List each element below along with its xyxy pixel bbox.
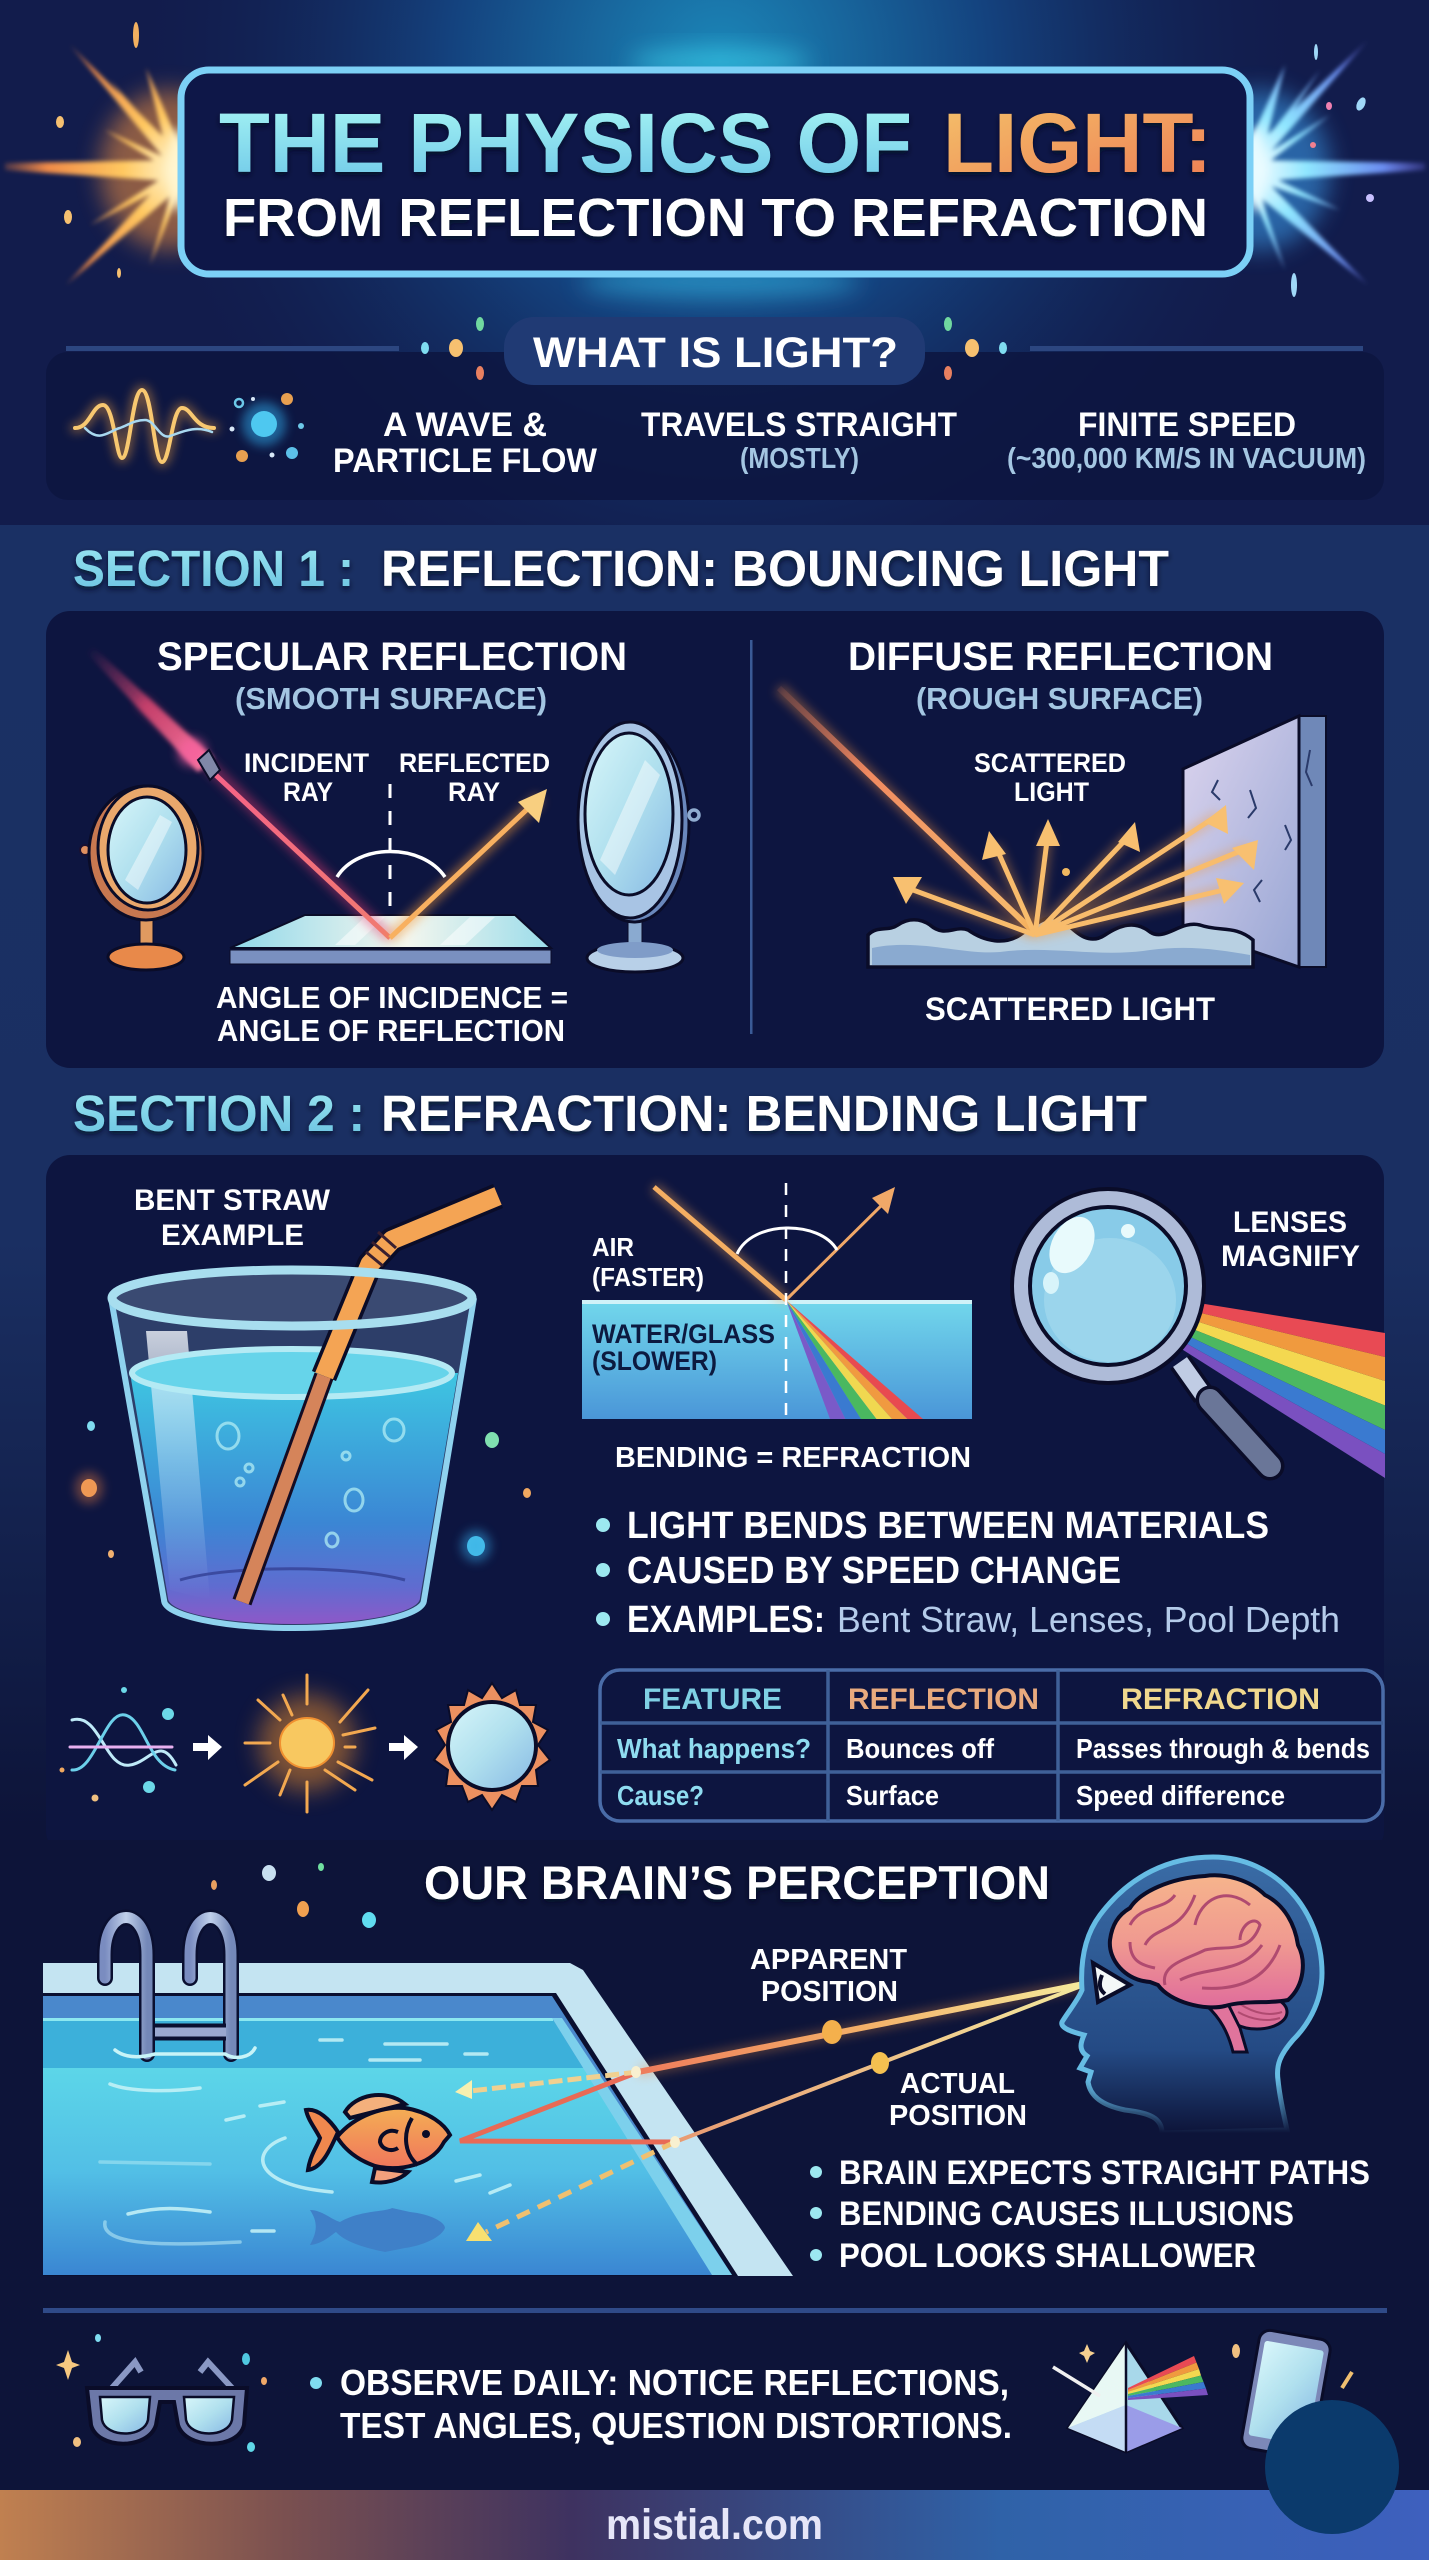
table header: REFLECTION (848, 1683, 1039, 1716)
title line 1: LIGHT: (943, 96, 1212, 190)
normal line and angle arc (337, 784, 445, 912)
labels: incident and reflected (244, 748, 550, 807)
table row: cause: Surface (846, 1780, 939, 1811)
text: angle law: ANGLE OF INCIDENCE = (216, 980, 568, 1015)
dashed apparent paths (455, 2072, 675, 2241)
label: lenses magnify: MAGNIFY (1221, 1240, 1360, 1273)
arrow (193, 1735, 222, 1760)
labels: incident and reflected: RAY (448, 777, 500, 807)
icon: flat mirror surface (230, 915, 551, 964)
label: bent straw (134, 1184, 331, 1252)
text: finite speed (1007, 406, 1366, 475)
table header (643, 1683, 1320, 1716)
labels: incident and reflected: RAY (283, 777, 333, 807)
heading: what is light: WHAT IS LIGHT? (533, 329, 898, 377)
text: observe daily: OBSERVE DAILY: NOTICE REFLECTIONS, (340, 2362, 1009, 2403)
text: wave and particle: PARTICLE FLOW (333, 442, 598, 480)
sparkles around glasses (56, 2334, 267, 2452)
sparkles around heading (421, 317, 1007, 380)
list: refraction facts: Bent Straw, Lenses, Pool Depth (837, 1599, 1340, 1640)
table row: cause: Speed difference (1076, 1780, 1285, 1811)
icon: phone (1232, 2329, 1352, 2459)
icon: wave (75, 390, 214, 462)
diagram: refraction at boundary (582, 1183, 972, 1419)
scattered rays (779, 688, 1258, 935)
icon: prism (1053, 2343, 1208, 2452)
label: bent straw: BENT STRAW (134, 1184, 331, 1217)
icon: head with brain (1062, 1857, 1322, 2133)
sparkles above pool (211, 1863, 376, 1928)
list: refraction facts: LIGHT BENDS BETWEEN MATERIALS (627, 1505, 1269, 1547)
text: travels straight (641, 406, 957, 475)
heading: section 2: SECTION 2 : (73, 1085, 365, 1142)
list: brain perception facts: POOL LOOKS SHALLOWER (839, 2237, 1256, 2275)
icon: left light burst (5, 22, 240, 285)
panel: refraction (46, 1155, 1385, 1855)
panel: what is light (46, 317, 1384, 500)
text: wave and particle (333, 406, 598, 480)
list: brain perception facts: BENDING CAUSES ILLUSIONS (839, 2195, 1294, 2233)
icon: laser pointer (178, 738, 220, 780)
heading: section 1: SECTION 1 : (73, 540, 354, 597)
text: finite speed: FINITE SPEED (1078, 406, 1296, 444)
water ripples (100, 2040, 510, 2244)
icon: sun (245, 1675, 375, 1812)
list: refraction facts: CAUSED BY SPEED CHANGE (627, 1550, 1121, 1592)
labels: media (592, 1232, 775, 1376)
panel: reflection (46, 611, 1384, 1068)
bar: footer (0, 2490, 1429, 2560)
icon: magnifying glass (1012, 1189, 1270, 1466)
text: finite speed: (~300,000 KM/S IN VACUUM) (1007, 443, 1366, 475)
table row: what happens: Passes through & bends (1076, 1733, 1370, 1764)
icon: left mirror (80, 786, 203, 970)
heading: specular reflection (157, 635, 627, 716)
label: lenses magnify (1221, 1206, 1360, 1273)
heading: diffuse reflection (848, 635, 1273, 716)
table header: REFRACTION (1121, 1683, 1320, 1716)
text: bending equals refraction: BENDING = REFRACTION (615, 1442, 971, 1474)
labels: media: AIR (592, 1232, 634, 1262)
heading: specular reflection: (SMOOTH SURFACE) (235, 681, 547, 716)
labels: scattered light: SCATTERED (974, 748, 1126, 778)
icon: wave to sun to lens sequence (60, 1675, 550, 1812)
arrow (389, 1735, 418, 1760)
actual position ray (675, 1983, 1089, 2142)
label: lenses magnify: LENSES (1233, 1206, 1347, 1239)
table: reflection vs refraction (600, 1670, 1383, 1821)
apparent position ray (638, 1983, 1089, 2072)
labels: apparent and actual position: POSITION (761, 1976, 898, 2008)
text: footer domain: mistial.com (606, 2501, 823, 2549)
table row: what happens: What happens? (617, 1733, 811, 1764)
incident and reflected rays (84, 644, 547, 938)
text: travels straight: TRAVELS STRAIGHT (641, 406, 957, 444)
background: lower section (0, 1840, 1429, 2560)
icon: rainbow from lens (1180, 1300, 1385, 1478)
labels: media: (SLOWER) (592, 1346, 717, 1376)
title line 1: THE PHYSICS OF (219, 96, 912, 190)
decorative blue orb (1265, 2400, 1399, 2534)
icon: right mirror (578, 722, 699, 972)
labels: media: (FASTER) (592, 1262, 704, 1292)
labels: apparent and actual position: ACTUAL (900, 2068, 1015, 2100)
heading: diffuse reflection: (ROUGH SURFACE) (916, 681, 1203, 716)
rainbow (786, 1300, 923, 1419)
labels: incident and reflected: REFLECTED (399, 748, 550, 778)
text: wave and particle: A WAVE & (383, 406, 547, 444)
icon: fish (306, 2095, 450, 2183)
text: angle law (216, 980, 568, 1048)
table row: what happens: Bounces off (846, 1733, 995, 1764)
text: travels straight: (MOSTLY) (740, 443, 859, 475)
icon: wave (60, 1687, 176, 1802)
icon: particles (230, 393, 304, 462)
text: scattered light caption: SCATTERED LIGHT (925, 991, 1215, 1027)
labels: incident and reflected: INCIDENT (244, 748, 369, 778)
icon: brain (1110, 1875, 1303, 2052)
refracted paths to fish (460, 2072, 675, 2142)
heading: diffuse reflection: DIFFUSE REFLECTION (848, 635, 1273, 679)
heading: specular reflection: SPECULAR REFLECTION (157, 635, 627, 679)
heading: what is light (504, 317, 925, 385)
table row: cause: Cause? (617, 1780, 704, 1811)
list: brain perception facts (810, 2154, 1370, 2275)
heading: section 2: REFRACTION: BENDING LIGHT (381, 1085, 1147, 1142)
icon: rough surface (868, 918, 1253, 967)
icon: rough wall (1183, 716, 1326, 967)
list: refraction facts: EXAMPLES: (627, 1599, 825, 1641)
icon: fish shadow (310, 2208, 445, 2252)
icon: glass with straw (111, 1196, 498, 1628)
icon: glasses (87, 2362, 247, 2444)
heading: section 1: REFLECTION: BOUNCING LIGHT (381, 540, 1169, 597)
labels: apparent and actual position: POSITION (889, 2100, 1027, 2132)
light paths (455, 1983, 1089, 2241)
list: refraction facts (596, 1505, 1340, 1641)
labels: apparent and actual position (750, 1944, 1027, 2132)
text: observe daily: TEST ANGLES, QUESTION DISTORTIONS. (340, 2405, 1012, 2446)
labels: scattered light (974, 748, 1126, 807)
title glow (580, 49, 860, 298)
labels: apparent and actual position: APPARENT (750, 1944, 907, 1976)
text: angle law: ANGLE OF REFLECTION (217, 1013, 565, 1048)
title line 2: FROM REFLECTION TO REFRACTION (223, 188, 1208, 248)
illustration: pool (43, 1963, 793, 2276)
title box (181, 70, 1250, 274)
straw (242, 1196, 498, 1602)
text: observe daily (310, 2362, 1012, 2446)
sparkles around glass (75, 1421, 531, 1562)
icon: eye (1093, 1963, 1130, 2002)
labels: scattered light: LIGHT (1014, 777, 1089, 807)
list: brain perception facts: BRAIN EXPECTS STRAIGHT PATHS (839, 2154, 1370, 2192)
label: bent straw: EXAMPLE (161, 1219, 304, 1252)
icon: right light burst (1190, 40, 1425, 297)
icon: pool ladder (105, 1918, 255, 2057)
table row: cause (617, 1780, 1285, 1811)
labels: media: WATER/GLASS (592, 1319, 775, 1349)
table header: FEATURE (643, 1683, 782, 1716)
icon: sun mirror (434, 1683, 550, 1810)
table row: what happens (617, 1733, 1370, 1764)
heading: our brain's perception: OUR BRAIN’S PERCEPTION (424, 1856, 1050, 1909)
